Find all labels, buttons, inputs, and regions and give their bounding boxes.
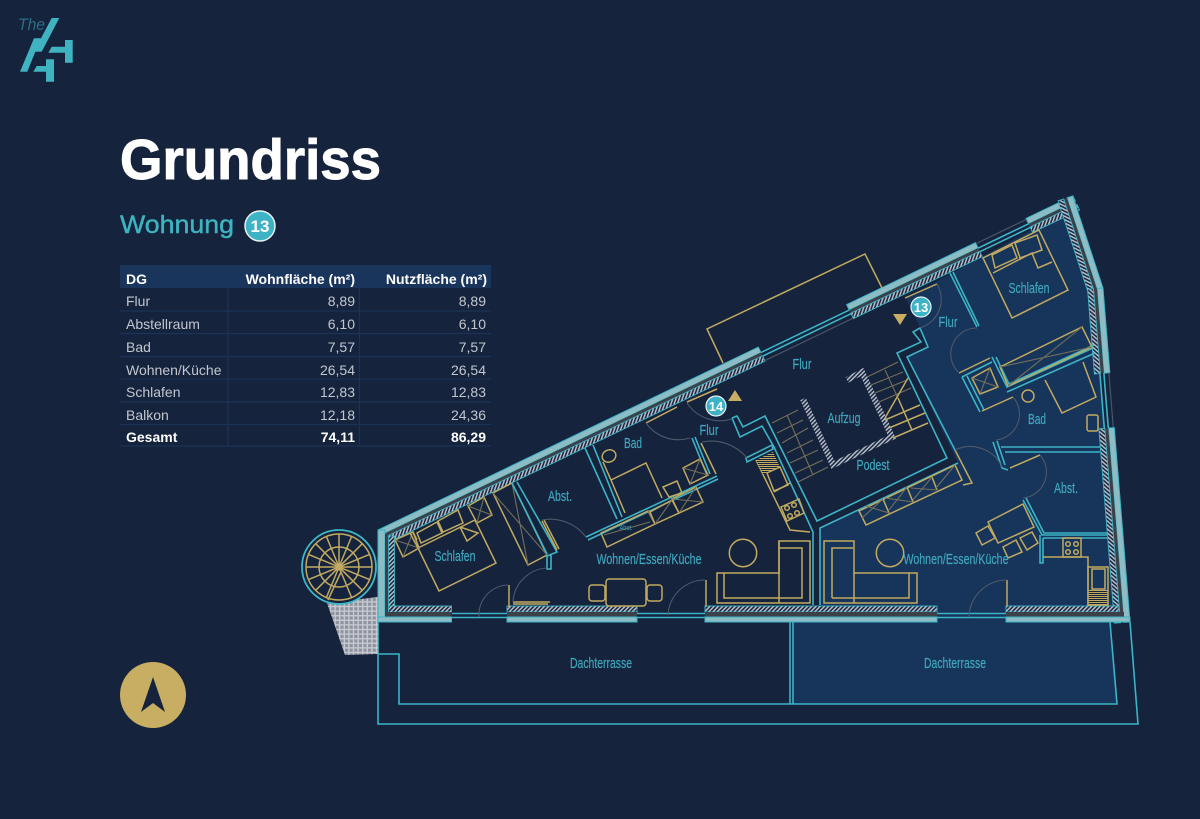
kitchen left: [756, 452, 810, 532]
terrace highlight: [793, 622, 1117, 704]
area table: 12,83: [451, 384, 486, 400]
walls right: [950, 272, 1107, 563]
bathroom fixtures right: [972, 327, 1098, 431]
area table: Abstellraum: [126, 316, 200, 332]
room labels: Abst.: [548, 488, 572, 505]
doors left: [509, 389, 717, 607]
area table: 6,10: [459, 316, 486, 332]
room labels: Abst.: [620, 525, 633, 532]
perimeter walls: [378, 196, 1130, 623]
area table: 8,89: [459, 293, 486, 309]
logo: The 4: The: [18, 15, 45, 34]
kitchen right: [1043, 538, 1108, 606]
floor plan: [302, 196, 1138, 724]
doors right: [905, 284, 1040, 606]
dining right: [976, 504, 1038, 558]
dining left: [589, 579, 662, 606]
area table: 6,10: [328, 316, 355, 332]
entrance marker 14: [706, 390, 742, 416]
entrance marker 13: [893, 297, 931, 325]
room labels: Flur: [792, 356, 812, 373]
sofa right: [824, 539, 917, 603]
stairs: [772, 362, 928, 482]
area table: Flur: [126, 293, 150, 309]
room labels: Bad: [1028, 411, 1046, 428]
entrance marker 13: 13: [914, 300, 928, 315]
sofa left: [717, 539, 810, 603]
room labels: Wohnen/Essen/Küche: [596, 551, 702, 568]
area table: 7,57: [328, 339, 355, 355]
room labels: Schlafen: [1008, 280, 1050, 297]
area table: Balkon: [126, 407, 169, 423]
bathroom walls left: [585, 437, 718, 540]
logo: The 4: [18, 15, 73, 82]
room labels: Wohnen/Essen/Küche: [904, 551, 1008, 568]
area table: Bad: [126, 339, 151, 355]
room labels: Abst.: [1054, 480, 1078, 497]
room labels: Podest: [856, 457, 890, 474]
stair core walls: [732, 328, 958, 605]
left apartment furniture: [395, 389, 810, 617]
subtitle: Wohnung 13: 13: [251, 217, 269, 236]
bed right: [983, 230, 1068, 318]
area table: DG: [126, 271, 147, 287]
subtitle: Wohnung 13: Wohnung: [120, 211, 234, 239]
area table: Gesamt: [126, 429, 178, 445]
wardrobe left: [493, 482, 557, 569]
area table: 8,89: [328, 293, 355, 309]
room labels: Flur: [700, 422, 718, 439]
room labels: [434, 280, 1078, 672]
right apartment furniture: [824, 230, 1108, 617]
area table: Wohnen/Küche: [126, 362, 222, 378]
room labels: Bad: [624, 435, 642, 452]
title: Grundriss: [120, 128, 381, 192]
area table: 26,54: [320, 362, 355, 378]
area table: 7,57: [459, 339, 486, 355]
room labels: Schlafen: [434, 548, 476, 565]
north arrow: [120, 662, 186, 728]
area table: 26,54: [451, 362, 486, 378]
room labels: Flur: [938, 314, 958, 331]
area table: Schlafen: [126, 384, 180, 400]
area table: [120, 265, 491, 446]
area table: 12,83: [320, 384, 355, 400]
apartment 13 highlight: [820, 210, 1120, 622]
entrance marker 14: 14: [709, 399, 724, 414]
wardrobe right: [859, 465, 962, 525]
room labels: Dachterrasse: [570, 655, 632, 672]
terrace outlines: [378, 622, 1138, 724]
spiral stair: [302, 530, 376, 604]
room labels: Aufzug: [828, 410, 860, 427]
bed left: [395, 497, 496, 591]
area table: 24,36: [451, 407, 486, 423]
balcony mesh: [327, 597, 378, 655]
area table: 86,29: [451, 429, 486, 445]
area table: Wohnfläche (m²): [246, 271, 355, 287]
room labels: Dachterrasse: [924, 655, 986, 672]
area table: 74,11: [321, 429, 355, 445]
subtitle: Wohnung 13: [120, 211, 275, 241]
area table: Nutzfläche (m²): [386, 271, 487, 287]
elevator shaft walls: [803, 372, 892, 465]
bathroom fixtures left: [600, 448, 708, 547]
balcony outline: [707, 254, 882, 363]
area table: 12,18: [320, 407, 355, 423]
